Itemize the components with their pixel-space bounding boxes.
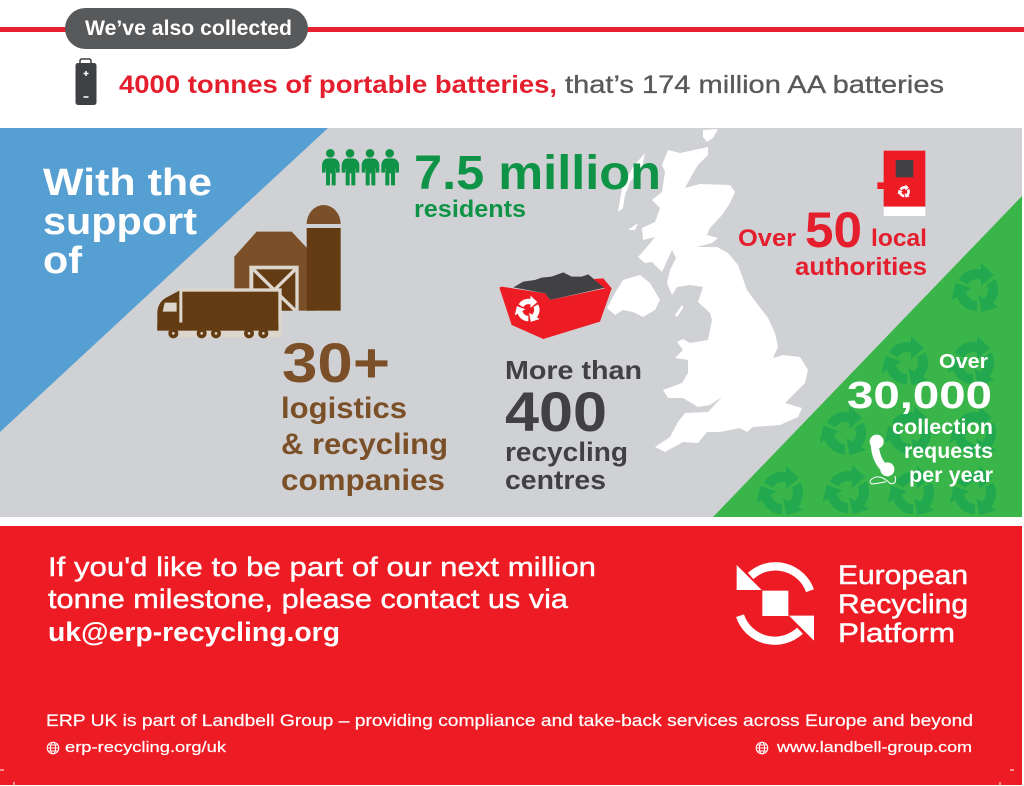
logo: European Recycling Platform: Recycling — [838, 589, 968, 619]
collection requests statistic: Over — [939, 351, 988, 373]
logistics statistic — [281, 331, 448, 497]
local authorities statistic — [738, 202, 927, 281]
recycling centres statistic — [505, 355, 642, 495]
collection requests statistic: per year — [909, 464, 993, 487]
heading: with the support of: of — [43, 240, 82, 282]
header pill: We've also collected: We’ve also collected — [85, 17, 292, 40]
logistics statistic: companies — [281, 464, 445, 497]
icon: truck — [157, 288, 282, 338]
icon: residents group — [322, 149, 399, 185]
battery statistic: 4000 tonnes of portable batteries, — [119, 71, 557, 99]
header rule — [0, 27, 1024, 32]
battery statistic: that’s 174 million AA batteries — [565, 71, 944, 99]
pattern: recycling symbols — [750, 263, 1007, 521]
call to action: If you'd like to be part of our next million — [48, 552, 596, 582]
icon: red skip — [499, 272, 612, 339]
logo: European Recycling Platform — [737, 560, 968, 648]
icon: barn and silo — [234, 205, 341, 311]
call to action: tonne milestone, please contact us via — [48, 584, 569, 614]
logistics statistic: & recycling — [281, 428, 448, 461]
local authorities statistic: Over — [738, 225, 796, 252]
icon: telephone — [870, 435, 896, 484]
recycling centres statistic: centres — [505, 465, 606, 495]
call to action: uk@erp-recycling.org — [48, 617, 340, 647]
logistics statistic: logistics — [281, 392, 407, 425]
collection requests statistic: 30,000 — [847, 375, 992, 417]
logistics statistic: 30+ — [282, 331, 390, 394]
panel: blue triangle — [0, 128, 328, 432]
panel: grey support background — [0, 128, 1022, 517]
header pill: We've also collected — [65, 8, 308, 49]
collection requests statistic: requests — [904, 440, 993, 463]
icon: battery — [76, 59, 96, 105]
logo: European Recycling Platform: Platform — [838, 618, 955, 648]
local authorities statistic: authorities — [795, 253, 927, 281]
link: erp-recycling.org/uk: erp-recycling.org/uk — [65, 739, 227, 756]
collection requests statistic: collection — [892, 416, 993, 439]
call to action — [48, 552, 596, 647]
panel: green triangle — [713, 196, 1022, 517]
heading: with the support of — [43, 162, 212, 282]
collection requests statistic — [847, 351, 993, 487]
battery statistic — [119, 71, 944, 99]
residents statistic — [414, 147, 661, 223]
link: www.landbell-group.com: www.landbell-group.com — [776, 739, 972, 756]
residents statistic: 7.5 million — [414, 147, 661, 200]
recycling centres statistic: recycling — [505, 437, 628, 467]
logo: European Recycling Platform: European — [838, 560, 968, 590]
residents statistic: residents — [414, 196, 526, 223]
icon: council bin — [877, 151, 925, 216]
recycling centres statistic: 400 — [505, 380, 607, 443]
local authorities statistic: 50 — [805, 202, 862, 258]
text: Landbell Group statement: ERP UK is part of Landbell Group – providing compliance and take-back services across Europe and beyond — [46, 711, 973, 730]
local authorities statistic: local — [871, 225, 927, 252]
heading: with the support of: With the — [43, 162, 212, 204]
panel: red footer — [0, 526, 1022, 785]
map: United Kingdom — [607, 129, 808, 452]
recycling centres statistic: More than — [505, 355, 642, 385]
heading: with the support of: support — [43, 201, 197, 243]
